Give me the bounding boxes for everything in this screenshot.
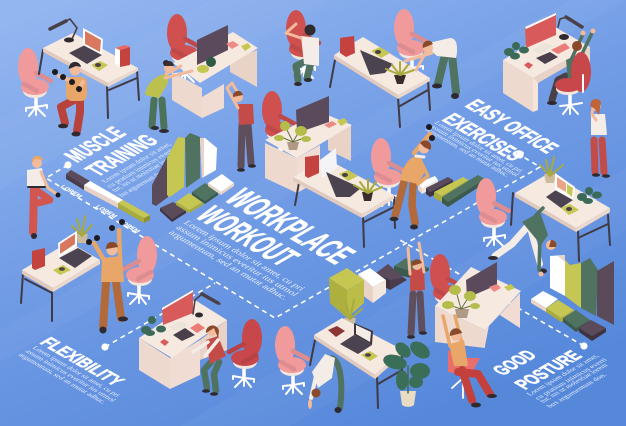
- heading: easy office exercises: EASY OFFICE: [460, 96, 564, 157]
- red pad: [328, 326, 345, 337]
- workstation: top, pink chair: [330, 9, 430, 127]
- bar labels: [58, 184, 141, 234]
- small cube: [524, 62, 533, 69]
- chair: [18, 48, 51, 116]
- desk: [511, 173, 610, 261]
- good posture text: bus argumentum don.: [545, 372, 609, 409]
- title body text: assum inimicus everitur ius utmol: [174, 224, 301, 298]
- title body text: Lorem ipsum dolor sit amet, cu pri: [181, 219, 308, 292]
- block desk: [435, 267, 521, 348]
- muscle training text: tur, ius ut molestiae lorem: [109, 153, 178, 193]
- red pad: [190, 323, 205, 333]
- muscle training text: bus argumentum don.: [116, 168, 167, 198]
- mouse pad: [91, 61, 108, 71]
- person: squatting woman: [193, 325, 226, 396]
- heading: muscle training: [59, 123, 165, 180]
- mouse pad: [339, 170, 358, 181]
- workstation: table with calendar: [293, 138, 404, 247]
- monitor: [466, 262, 497, 298]
- title: workplace workout: WORKOUT: [187, 201, 307, 271]
- calendar: [320, 148, 337, 178]
- monitor: [162, 290, 193, 331]
- desk: [330, 37, 430, 127]
- bar labels: LOREM: [116, 219, 141, 234]
- good posture text: Lorem ipsum dolor sit amet,: [525, 353, 601, 397]
- potted plant: [540, 157, 563, 183]
- potted plant: [72, 216, 92, 243]
- monitor: [197, 25, 228, 65]
- small cube: [160, 339, 169, 346]
- bar labels: LOREM: [93, 204, 118, 219]
- potted plant: [274, 121, 311, 150]
- mouse pad: [561, 204, 579, 215]
- heading: easy office exercises: [437, 96, 564, 164]
- folders: [340, 36, 355, 57]
- potted plant: [442, 285, 480, 318]
- red pad: [551, 43, 570, 54]
- heading: good posture: [488, 347, 587, 393]
- person: woman with white top at desk: [286, 10, 319, 86]
- person: bending woman: [308, 354, 342, 413]
- chair: [448, 350, 480, 398]
- mouse pad: [53, 265, 71, 275]
- flexibility text: Lorem ipsum dolor sit amet, cu pri: [30, 345, 122, 398]
- desk items: [197, 41, 251, 73]
- laptop: [546, 173, 575, 208]
- desk items: [489, 284, 501, 292]
- potted plant: [386, 62, 414, 84]
- workstation: top centre: [167, 14, 258, 118]
- person: leaning green: [145, 60, 192, 133]
- mouse pad: [361, 351, 378, 361]
- monitor: [296, 96, 329, 133]
- laptop: [340, 323, 373, 354]
- bar labels: LOREM: [58, 184, 83, 199]
- heading: good posture: GOOD: [488, 347, 542, 379]
- progress bar chart: muscle training: [58, 170, 150, 234]
- chair: left lower: [124, 236, 157, 304]
- workstation: centre block desk: [262, 91, 352, 193]
- mouse pad: [371, 47, 390, 58]
- desk: [293, 158, 395, 247]
- chair: [371, 138, 404, 206]
- folders: [305, 155, 319, 178]
- workstation: right middle: [476, 157, 610, 261]
- connector dots: [64, 151, 588, 351]
- laptop: [326, 172, 361, 197]
- dumbbell: [426, 124, 435, 141]
- good posture text: tur, ius ut molestiae lorem: [538, 362, 610, 404]
- laptop: [69, 28, 103, 64]
- keyboard: [536, 52, 558, 64]
- chair: red bottom: [229, 319, 262, 387]
- workstation: top left: [18, 19, 139, 118]
- workstation: left lower: [21, 216, 100, 321]
- muscle training text: Lorem ipsum dolor sit amet,: [99, 141, 174, 184]
- column chart: top left: [152, 133, 234, 222]
- title: workplace workout: WORKPLACE: [216, 183, 364, 269]
- title: workplace workout: [187, 183, 364, 271]
- easy office text: argumentum, sed an mutat adhuc.: [423, 127, 512, 178]
- person: bending man: [488, 208, 556, 276]
- potted plant: [504, 42, 529, 62]
- person: seated woman arms up: [547, 28, 596, 105]
- desk items: [324, 121, 337, 128]
- person: leaning man: [405, 38, 459, 99]
- person: man lifting dumbbell: [390, 124, 435, 230]
- person: woman hands up: [407, 243, 427, 339]
- person: woman with pink chair left: [27, 156, 60, 239]
- person: woman standing right: [590, 99, 610, 178]
- flexibility text: argumentum, sed an mutat adhuc.: [16, 352, 108, 405]
- chair: [430, 254, 463, 322]
- person: man on chair: [443, 316, 497, 408]
- workstation: top right: [503, 13, 596, 114]
- block desk: [172, 32, 258, 118]
- good posture text: cu pratium inimicus everti: [533, 357, 609, 401]
- monitor: [525, 13, 556, 54]
- potted plant: [354, 179, 382, 201]
- folders: [115, 45, 130, 67]
- column chart: right: [531, 255, 614, 341]
- laptop: [360, 50, 393, 75]
- person: man overhead dumbbells: [86, 219, 128, 334]
- dashed connector lines: [46, 155, 584, 347]
- heading: muscle training: MUSCLE: [59, 123, 132, 166]
- desk lamp: [558, 17, 582, 40]
- potted plant dark: [577, 187, 602, 207]
- heading: easy office exercises: EXERCISES: [437, 110, 530, 164]
- dumbbells: [86, 219, 125, 245]
- person: muscle man: [52, 62, 87, 137]
- easy office text: assum inimicus everitur ius utmol: [428, 124, 521, 178]
- potted palm: [382, 338, 433, 407]
- desk lamp: [50, 19, 77, 39]
- block desk: [265, 112, 352, 193]
- heading: muscle training: TRAINING: [80, 131, 165, 180]
- block desk: [139, 300, 227, 389]
- chair: [476, 178, 509, 246]
- workstation: lower table: [310, 300, 403, 408]
- muscle training text: cu pratium inimicus everti: [104, 147, 176, 189]
- block chart: centre right: [329, 258, 429, 318]
- desk lamp: [193, 294, 220, 318]
- chair: [394, 9, 427, 77]
- laptop: [58, 231, 92, 268]
- heading: good posture: POSTURE: [510, 348, 587, 393]
- workstation: right block desk: [430, 254, 521, 348]
- flexibility text: assum inimicus everitur ius utmol: [23, 348, 118, 403]
- workstation: bottom centre: [139, 290, 227, 389]
- keyboard: [173, 328, 195, 341]
- chair: pink bottom: [275, 326, 308, 394]
- title body text: argumentum, sed an mutat adhuc.: [166, 229, 291, 301]
- folders: [32, 248, 45, 270]
- desk: [21, 242, 100, 321]
- desk: [39, 33, 139, 118]
- potted plant green: [340, 300, 362, 327]
- person: stretching woman: [227, 83, 256, 172]
- heading: flexibility: FLEXIBILITY: [35, 335, 128, 389]
- block desk: [503, 27, 590, 112]
- block chart: easy office: [418, 175, 485, 207]
- potted plant: [141, 316, 166, 340]
- chair: [167, 14, 200, 82]
- desk: [310, 318, 403, 408]
- chair: [555, 52, 591, 114]
- dumbbells: [52, 69, 82, 92]
- chair: [262, 91, 295, 159]
- easy office text: Lorem ipsum dolor sit amet, cu pri: [432, 120, 525, 174]
